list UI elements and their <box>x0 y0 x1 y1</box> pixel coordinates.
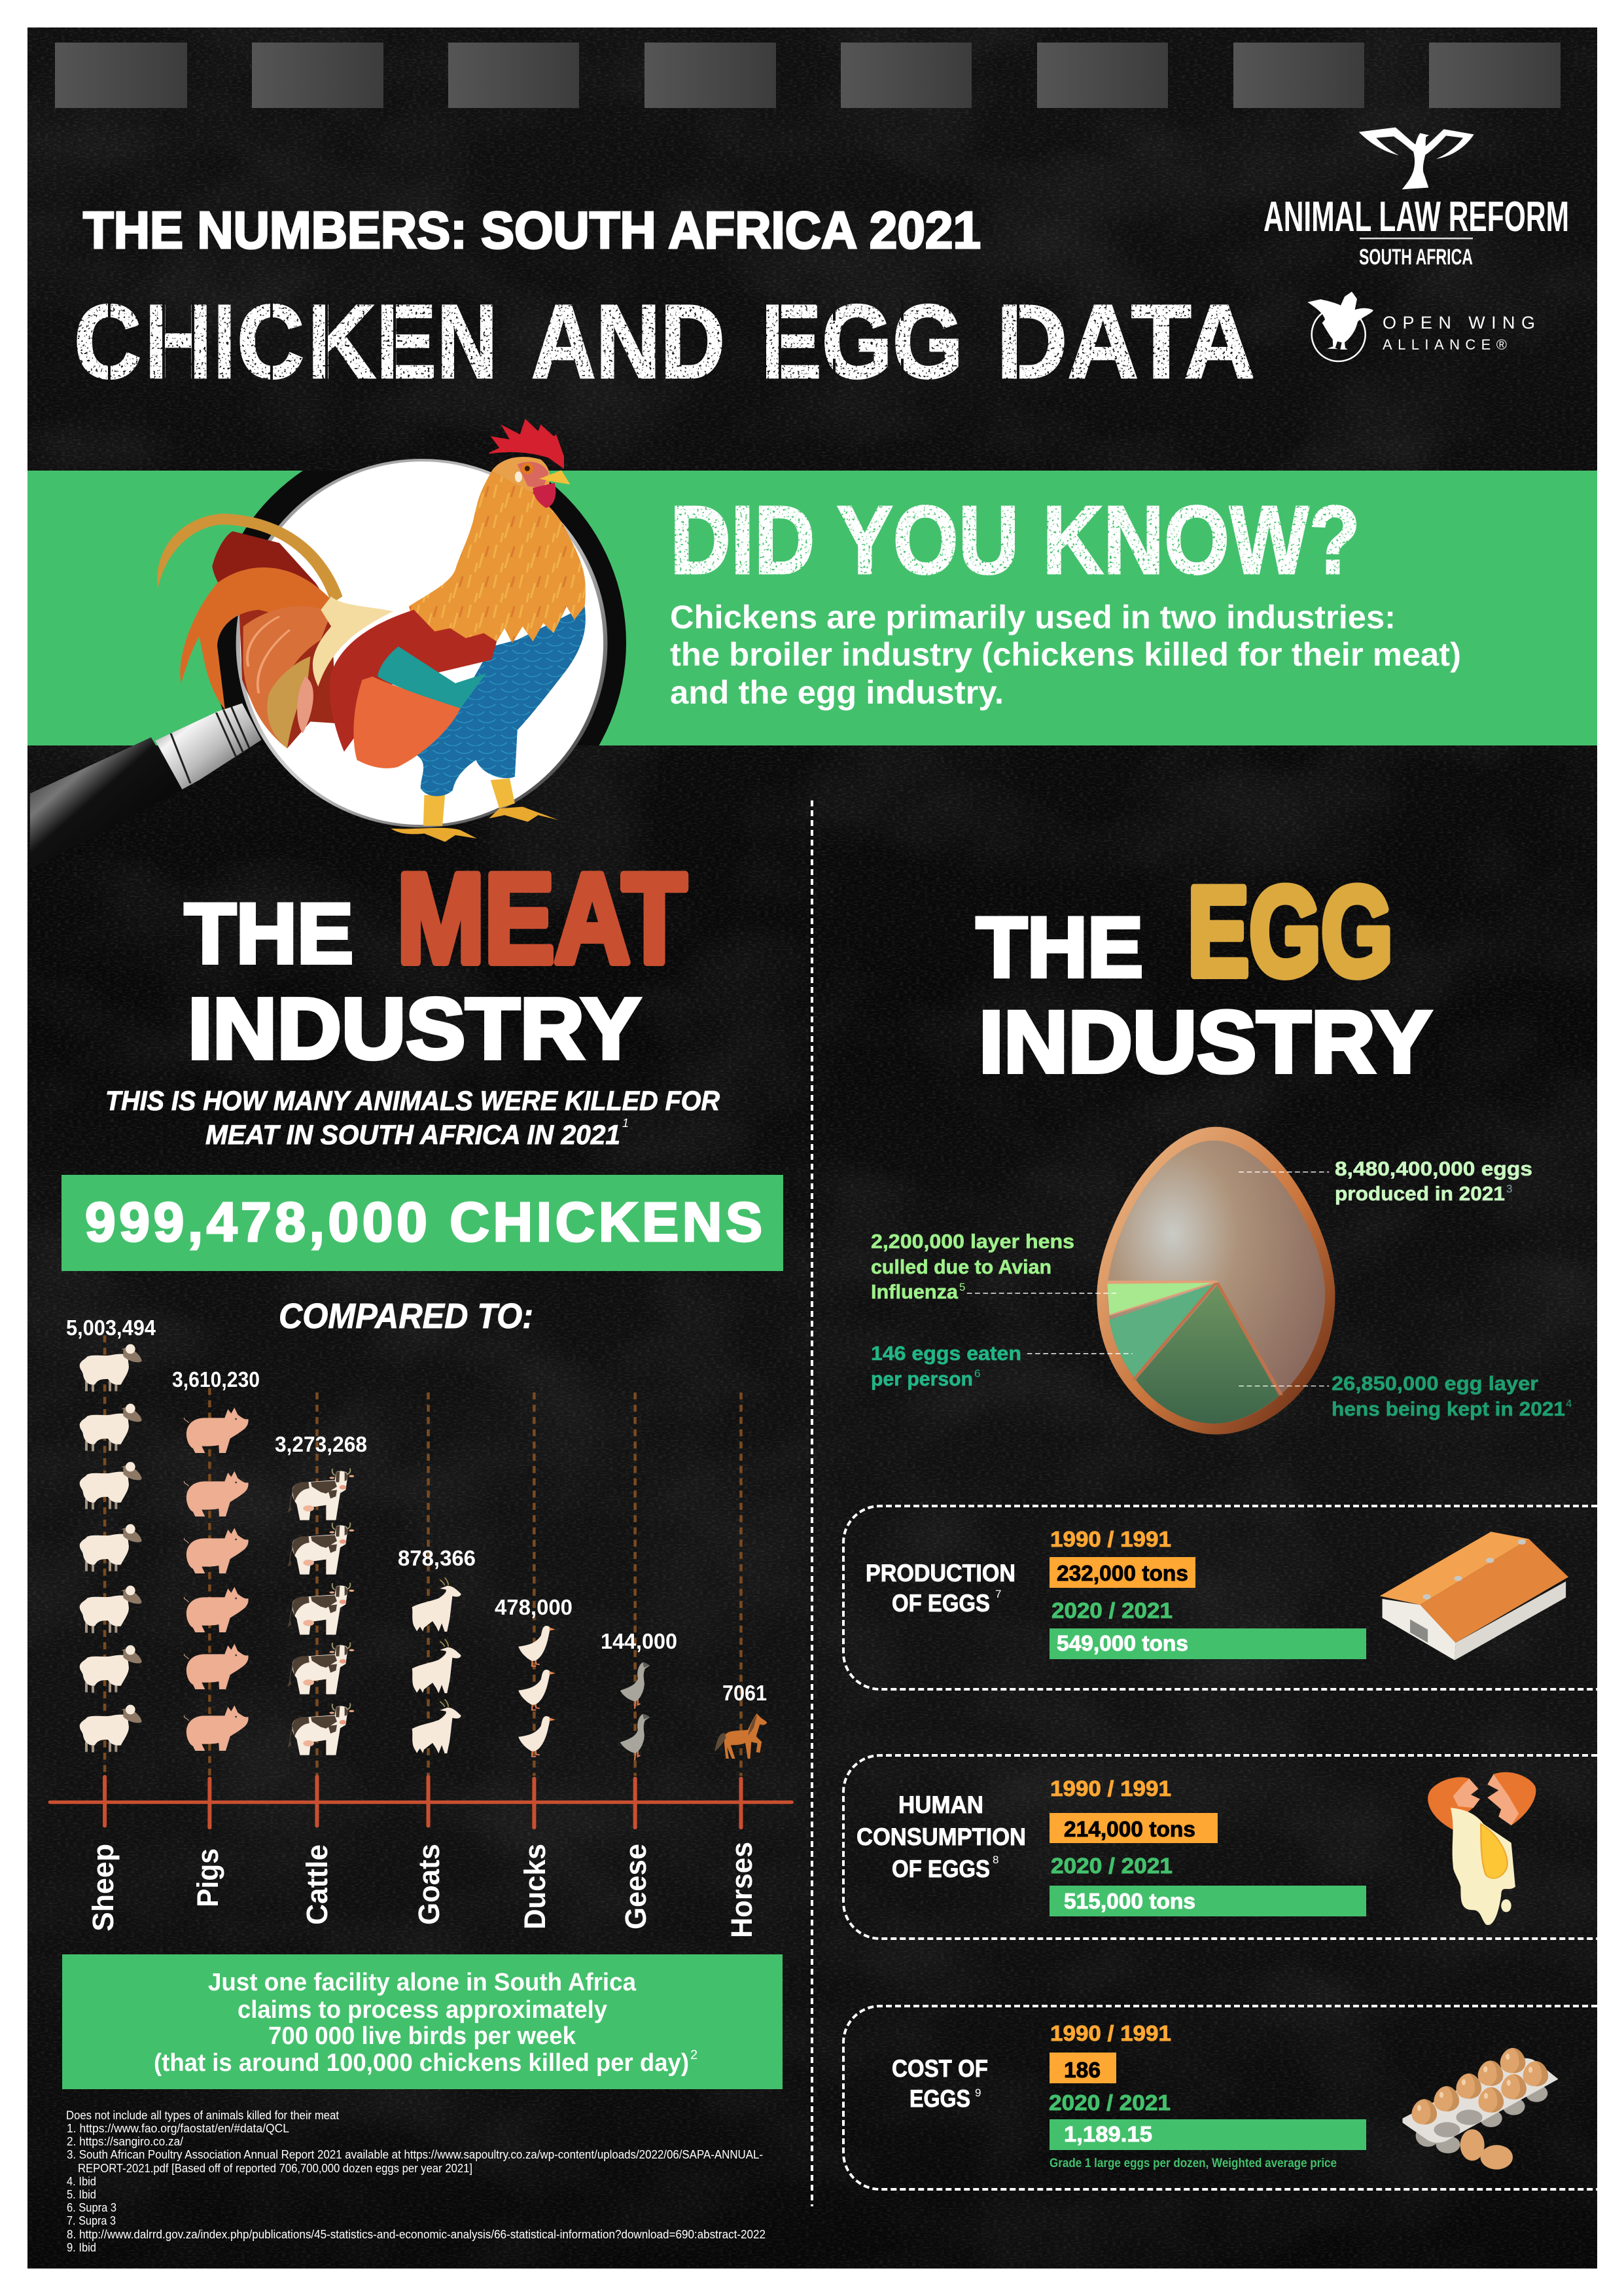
callout: one facility: 700 000 live birds per week <box>268 2022 576 2050</box>
egg label: eggs eaten: per person <box>871 1367 973 1390</box>
heading: the egg industry: THE <box>976 899 1143 995</box>
heading: the egg industry: EGG <box>1188 861 1393 1003</box>
callout: one facility: 2 <box>690 2048 697 2062</box>
pictogram chart: animals killed <box>50 1316 792 1938</box>
icon: barn <box>1380 1532 1568 1660</box>
logo: Open Wing Alliance: ALLIANCE® <box>1383 336 1507 353</box>
horse pictogram <box>715 1713 767 1759</box>
title: K <box>308 283 376 400</box>
pictogram chart: animals killed: 7061 <box>722 1681 767 1705</box>
egg label: layer hens culled: Influenza <box>871 1280 959 1303</box>
egg label: eggs produced: produced in 2021 <box>1335 1182 1505 1205</box>
footnotes: 8. http://www.dalrrd.gov.za/index.php/publications/45-statistics-and-economic-analysis/66-statistical-information?download=690:abstract-2022 <box>67 2228 766 2241</box>
meat subheading: MEAT IN SOUTH AFRICA IN 2021 <box>205 1119 620 1150</box>
pictogram chart: animals killed: Cattle <box>300 1844 334 1925</box>
footnotes: Does not include all types of animals killed for their meat <box>66 2109 339 2122</box>
pig pictograms <box>184 1408 249 1751</box>
did you know text: the broiler industry (chickens killed for their meat) <box>670 636 1461 673</box>
panel: human consumption of eggs: 515,000 tons <box>1064 1889 1195 1913</box>
logo: Open Wing Alliance <box>1307 292 1535 361</box>
heading: the egg industry: INDUSTRY <box>979 994 1432 1091</box>
subtitle: THE NUMBERS: SOUTH AFRICA 2021 <box>83 201 981 259</box>
heading: the meat industry: MEAT <box>397 848 686 990</box>
footnotes: 4. Ibid <box>67 2175 96 2188</box>
panel: cost of eggs: COST OF <box>892 2055 988 2082</box>
pictogram chart: animals killed: 478,000 <box>495 1595 573 1619</box>
panel: human consumption of eggs: 2020 / 2021 <box>1051 1854 1173 1878</box>
panel: production of eggs: 232,000 tons <box>1057 1561 1188 1585</box>
egg label: eggs produced <box>1335 1157 1532 1205</box>
goat pictograms <box>412 1577 461 1753</box>
pictogram chart: animals killed: Sheep <box>86 1844 120 1931</box>
egg label: layer hens kept <box>1332 1372 1572 1420</box>
film strip header blocks <box>55 43 1561 108</box>
pictogram chart: animals killed: Horses <box>725 1842 758 1938</box>
footnotes: 6. Supra 3 <box>67 2201 116 2214</box>
title: DATA <box>997 283 1255 400</box>
did you know heading: DID YOU KNOW? <box>670 486 1360 594</box>
callout: one facility <box>62 1954 783 2089</box>
heading: the meat industry: THE <box>185 886 353 981</box>
did you know text: and the egg industry. <box>670 674 1004 711</box>
callout: one facility: claims to process approximately <box>238 1996 607 2024</box>
footnotes: 7. Supra 3 <box>67 2214 116 2227</box>
panel: human consumption of eggs: OF EGGS <box>892 1856 990 1882</box>
title: I <box>214 283 235 400</box>
title: AND <box>531 283 725 400</box>
heading: the meat industry <box>185 848 686 1077</box>
logo: Animal Law Reform South Africa: SOUTH AFRICA <box>1359 245 1473 270</box>
logo: Animal Law Reform South Africa <box>1263 128 1569 270</box>
sheep pictograms <box>80 1344 142 1752</box>
pictogram chart: animals killed: 878,366 <box>398 1546 476 1570</box>
pictogram chart: animals killed: 5,003,494 <box>66 1316 156 1340</box>
egg label: layer hens kept: 26,850,000 egg layer <box>1332 1372 1538 1395</box>
panel: cost of eggs: EGGS <box>909 2085 970 2112</box>
pictogram chart: animals killed: 3,273,268 <box>275 1432 367 1456</box>
did you know text <box>670 599 1461 711</box>
goose pictograms <box>620 1662 650 1761</box>
compared to heading: COMPARED TO: <box>279 1297 533 1336</box>
egg label: layer hens kept: hens being kept in 2021 <box>1332 1397 1565 1420</box>
meat subheading: THIS IS HOW MANY ANIMALS WERE KILLED FOR <box>105 1085 720 1116</box>
title: H <box>145 283 212 400</box>
egg label: layer hens culled <box>871 1230 1074 1303</box>
title: C <box>237 283 304 400</box>
panel: production of eggs <box>843 1506 1597 1689</box>
panel: human consumption of eggs <box>843 1755 1597 1939</box>
pictogram chart: animals killed: Ducks <box>518 1844 552 1929</box>
egg label: layer hens culled: culled due to Avian <box>871 1255 1051 1278</box>
egg label: eggs eaten: 6 <box>974 1367 980 1380</box>
footnotes: 2. https://sangiro.co.za/ <box>67 2135 183 2148</box>
footnotes: 9. Ibid <box>67 2241 96 2254</box>
duck pictograms <box>518 1626 556 1757</box>
panel: cost of eggs: 2020 / 2021 <box>1049 2090 1171 2115</box>
panel: human consumption of eggs: 8 <box>993 1854 998 1866</box>
meat subheading <box>105 1085 720 1150</box>
did you know text: Chickens are primarily used in two industries: <box>670 599 1396 636</box>
icon: broken egg <box>1428 1772 1536 1925</box>
pictogram chart: animals killed: Pigs <box>191 1848 224 1907</box>
callout: one facility: (that is around 100,000 chickens killed per day) <box>154 2049 689 2077</box>
panel: production of eggs: 549,000 tons <box>1057 1631 1188 1655</box>
panel: cost of eggs: 1,189.15 <box>1064 2122 1152 2146</box>
title: N <box>437 283 497 400</box>
meat subheading: 1 <box>622 1117 629 1130</box>
egg label: eggs produced: 3 <box>1506 1183 1512 1195</box>
egg label: layer hens kept: 4 <box>1566 1397 1572 1410</box>
did you know banner <box>27 471 1597 745</box>
egg label: eggs eaten <box>871 1342 1021 1390</box>
panel: human consumption of eggs: 214,000 tons <box>1064 1817 1195 1841</box>
heading: the egg industry <box>976 861 1432 1091</box>
callout: 999,478,000 chickens: 999,478,000 CHICKENS <box>85 1191 762 1253</box>
footnotes: REPORT-2021.pdf [Based off of reported 706,700,000 dozen eggs per year 2021] <box>78 2162 472 2175</box>
panel: human consumption of eggs: CONSUMPTION <box>856 1823 1026 1850</box>
pictogram chart: animals killed: Goats <box>412 1844 446 1925</box>
callout: 999,478,000 chickens <box>62 1175 783 1271</box>
footnotes <box>66 2109 766 2254</box>
icon: egg carton <box>1402 2048 1559 2170</box>
panel: cost of eggs: 1990 / 1991 <box>1050 2021 1171 2045</box>
title: C <box>74 283 141 400</box>
panel: human consumption of eggs: 1990 / 1991 <box>1050 1776 1171 1801</box>
footnotes: 1. https://www.fao.org/faostat/en/#data/QCL <box>67 2122 289 2135</box>
title: E <box>376 283 436 400</box>
panel: cost of eggs: 9 <box>975 2087 981 2099</box>
panel: human consumption of eggs: HUMAN <box>898 1791 983 1818</box>
magnifying glass and rooster <box>30 419 605 870</box>
egg label: eggs produced: 8,480,400,000 eggs <box>1335 1157 1532 1180</box>
logo: Open Wing Alliance: OPEN WING <box>1383 313 1535 332</box>
pictogram chart: animals killed: 3,610,230 <box>172 1367 260 1391</box>
pictogram chart: animals killed: Geese <box>619 1844 652 1929</box>
egg label: layer hens culled: 5 <box>959 1281 965 1293</box>
pictogram chart: animals killed: 144,000 <box>601 1629 677 1653</box>
panel: production of eggs: OF EGGS <box>892 1590 990 1617</box>
panel: production of eggs: 7 <box>995 1588 1001 1600</box>
panel: cost of eggs <box>843 2006 1597 2189</box>
title <box>74 283 1255 400</box>
egg pie chart <box>967 1127 1335 1435</box>
callout: one facility: Just one facility alone in South Africa <box>208 1969 637 1996</box>
heading: the meat industry: INDUSTRY <box>188 980 641 1077</box>
footnotes: 3. South African Poultry Association Annual Report 2021 available at https://www.sapoultry.co.za/wp-content/uploads/2022/06/SAPA-ANNUAL- <box>67 2148 763 2161</box>
cattle pictograms <box>287 1468 354 1755</box>
egg label: layer hens culled: 2,200,000 layer hens <box>871 1230 1074 1253</box>
panel: cost of eggs: Grade 1 large eggs per dozen, Weighted average price <box>1050 2157 1337 2170</box>
panel: cost of eggs: 186 <box>1064 2058 1101 2082</box>
panel: production of eggs: 2020 / 2021 <box>1051 1598 1173 1623</box>
panel: production of eggs: PRODUCTION <box>866 1560 1015 1587</box>
egg label: eggs eaten: 146 eggs eaten <box>871 1342 1021 1365</box>
panel: production of eggs: 1990 / 1991 <box>1050 1527 1171 1551</box>
footnotes: 5. Ibid <box>67 2188 96 2201</box>
title: EGG <box>761 283 963 400</box>
